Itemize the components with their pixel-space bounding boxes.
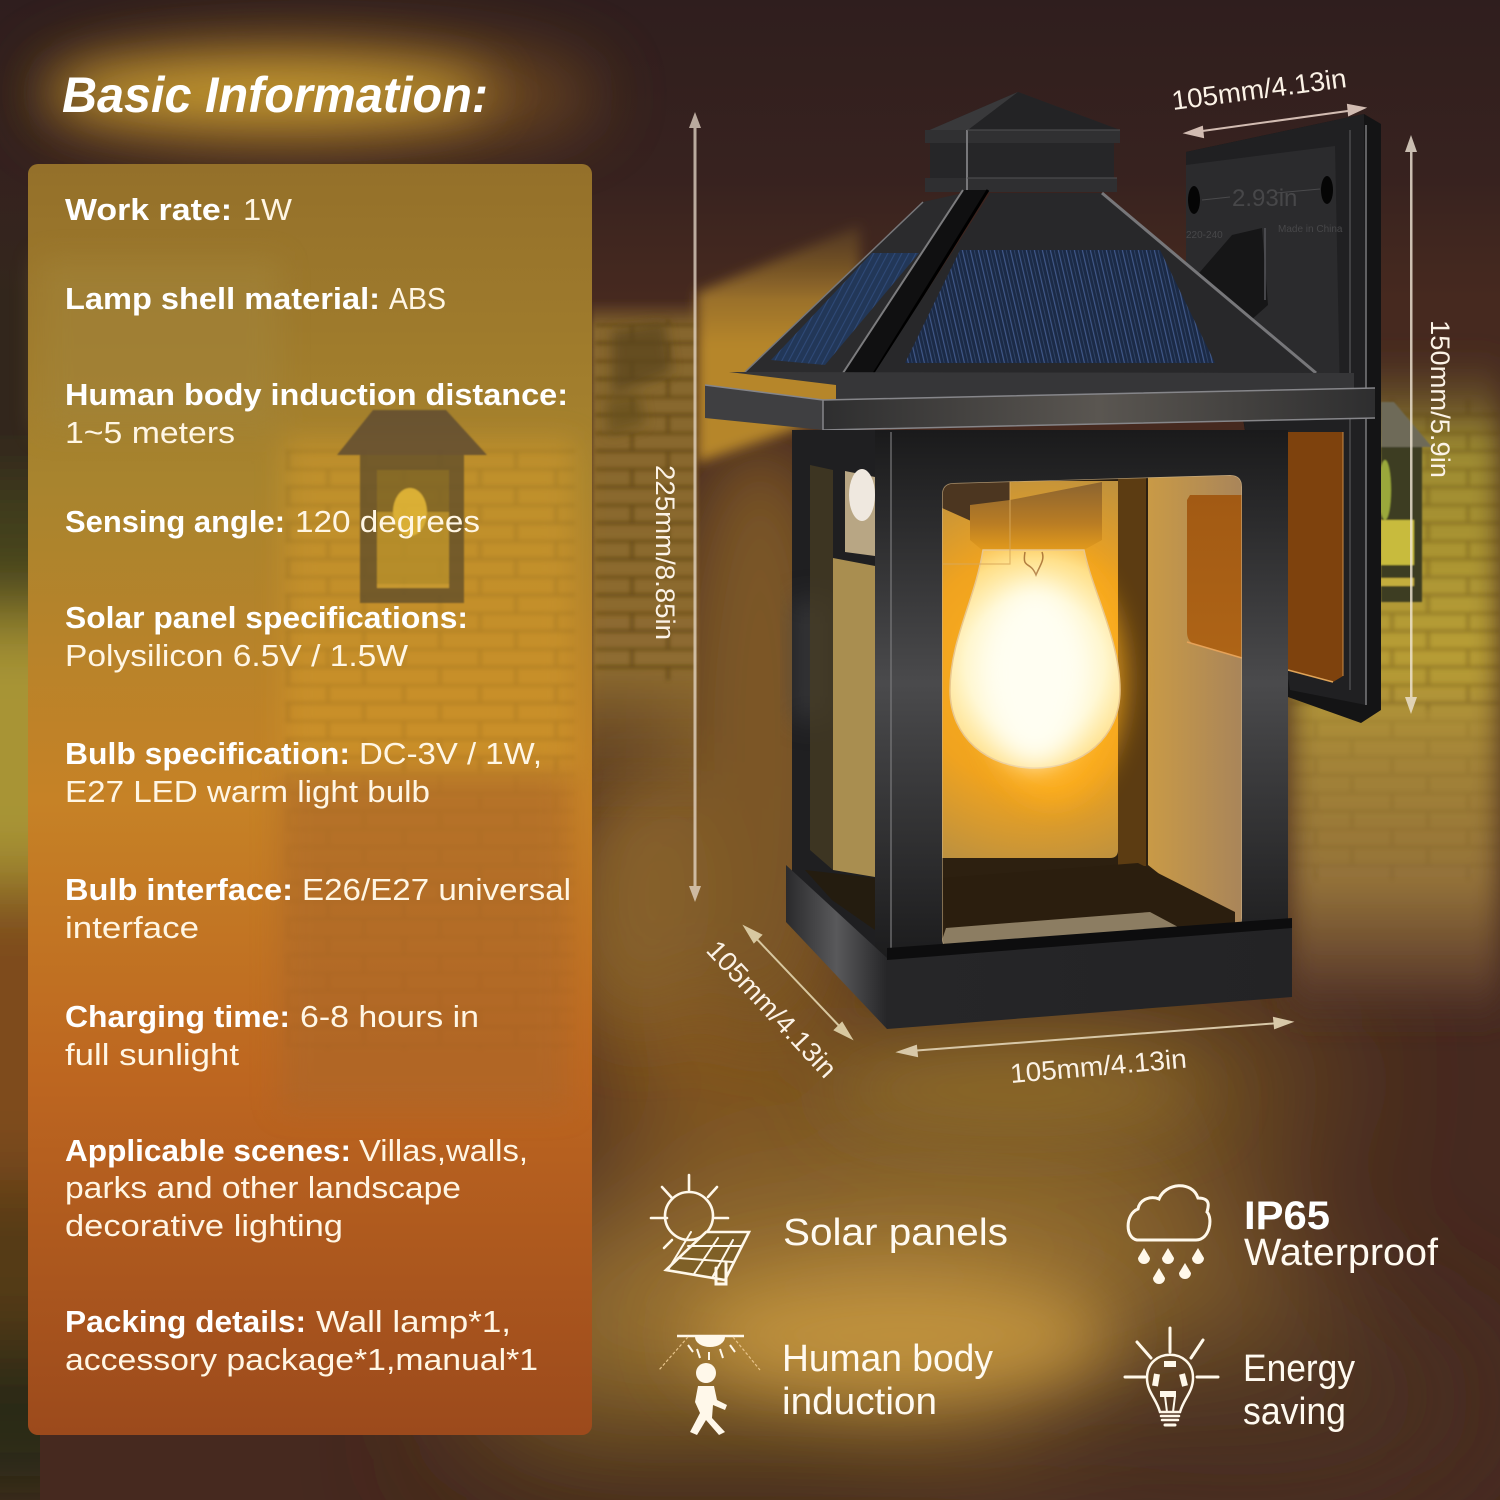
- ghost lamp on wall at the right edge: [1379, 402, 1432, 602]
- feature: solar panels: [651, 1175, 1008, 1284]
- scene: sunlit wall above lamp and brick pier: [697, 225, 860, 463]
- roof front face with solar panel: [870, 193, 1316, 380]
- dimension label: back plate height: 150mm/5.9in: [1425, 320, 1455, 478]
- front frame columns: [875, 430, 1288, 958]
- spec: applicable scenes: Applicable scenes:: [65, 1133, 351, 1168]
- spec: work rate: [65, 192, 293, 227]
- spec: packing details: [65, 1304, 538, 1377]
- label: energy saving: saving: [1243, 1391, 1346, 1433]
- mounting back plate: Made in China: [1278, 224, 1343, 235]
- mounting back plate: [1180, 114, 1381, 723]
- dimension: depth arrow: [745, 927, 851, 1038]
- spec: applicable scenes: [65, 1133, 528, 1243]
- outer title glow: [40, 40, 600, 150]
- spec: induction distance: 1~5 meters: [65, 415, 235, 450]
- label: solar panels: Solar panels: [783, 1212, 1008, 1254]
- glow around bulb: [980, 558, 1124, 802]
- dimension label: front width: 105mm/4.13in: [1009, 1044, 1188, 1089]
- spec: sensing angle: 120 degrees: [295, 504, 480, 539]
- spec: lamp shell material: ABS: [389, 281, 446, 316]
- dimension: back plate height arrow: [1405, 135, 1417, 714]
- feature: energy saving: [1125, 1328, 1355, 1433]
- dimension label: back plate width: 105mm/4.13in: [1170, 63, 1348, 116]
- spec: bulb specification: DC-3V / 1W,: [359, 736, 542, 771]
- ghost lamp in panel: [337, 410, 487, 603]
- label: human body induction: [782, 1338, 993, 1423]
- feature: waterproof: [1128, 1186, 1438, 1284]
- dimension label: depth: 105mm/4.13in: [701, 935, 843, 1084]
- spec: induction distance: Human body induction distance:: [65, 377, 568, 412]
- dimension label: height: 225mm/8.85in: [650, 465, 680, 640]
- spec: work rate: 1W: [243, 192, 293, 227]
- spec: solar panel: Solar panel specifications:: [65, 600, 468, 635]
- mounting back plate: 2.93in: [1232, 185, 1297, 212]
- spec: bulb interface: E26/E27 universal: [302, 872, 571, 907]
- dimension: front width arrow: [899, 1018, 1291, 1056]
- spec: solar panel: [65, 600, 468, 673]
- roof eave: [705, 372, 1375, 430]
- spec: solar panel: Polysilicon 6.5V / 1.5W: [65, 638, 409, 673]
- icon: sensor light and walking person: [659, 1336, 760, 1435]
- spec: induction distance: [65, 377, 568, 450]
- title: Basic Information:: [62, 67, 488, 123]
- spec: charging time: 6-8 hours in: [300, 999, 479, 1034]
- label: IP65: IP65: [1244, 1194, 1330, 1238]
- spec: packing details: accessory package*1,manual*1: [65, 1342, 538, 1377]
- spec: sensing angle: [65, 504, 480, 539]
- transparent box edge over socket: [942, 481, 1010, 564]
- panel brick wall photo showing through: [40, 260, 575, 1110]
- spec: charging time: full sunlight: [65, 1037, 239, 1072]
- window interior: [942, 475, 1242, 950]
- spec: lamp shell material: Lamp shell material:: [65, 281, 380, 316]
- mounting back plate: 220-240: [1186, 230, 1223, 241]
- spec: work rate: Work rate:: [65, 192, 232, 227]
- lamp left side: [792, 430, 875, 958]
- icon: rain cloud: [1128, 1186, 1210, 1284]
- spec: charging time: Charging time:: [65, 999, 290, 1034]
- label: human body induction: Human body: [782, 1338, 993, 1380]
- side strip left of panel: [0, 0, 40, 1500]
- spec: bulb specification: Bulb specification:: [65, 736, 350, 771]
- bulb socket: [970, 482, 1102, 550]
- spec: bulb specification: E27 LED warm light bulb: [65, 774, 430, 809]
- spec: applicable scenes: decorative lighting: [65, 1208, 343, 1243]
- glowing bulb: [950, 550, 1120, 768]
- spec: applicable scenes: parks and other landscape: [65, 1170, 461, 1205]
- feature: human body induction: [659, 1336, 993, 1435]
- icon: sun and solar panel: [651, 1175, 749, 1284]
- spec: bulb interface: [65, 872, 571, 945]
- title glow: [45, 58, 495, 126]
- label: human body induction: induction: [782, 1381, 937, 1423]
- lamp base: [786, 865, 1292, 1029]
- roof finial: [925, 92, 1120, 192]
- lamp product illustration: [705, 92, 1381, 1029]
- panel: specifications: [28, 164, 592, 1435]
- label: energy saving: [1243, 1348, 1355, 1433]
- roof left face with solar cell: [745, 190, 988, 380]
- spec: packing details: Packing details:: [65, 1304, 306, 1339]
- spec: bulb specification: [65, 736, 542, 809]
- label: waterproof: Waterproof: [1244, 1232, 1438, 1274]
- spec: bulb interface: Bulb interface:: [65, 872, 293, 907]
- spec: packing details: Wall lamp*1,: [316, 1304, 511, 1339]
- dimension: back plate width arrow: [1186, 105, 1364, 137]
- icon: recycling light bulb: [1125, 1328, 1218, 1425]
- label: energy saving: Energy: [1243, 1348, 1355, 1390]
- spec: bulb interface: interface: [65, 910, 199, 945]
- spec: charging time: [65, 999, 479, 1072]
- dimension: total height arrow: [689, 112, 701, 902]
- spec: sensing angle: Sensing angle:: [65, 504, 285, 539]
- spec: applicable scenes: Villas,walls,: [359, 1133, 528, 1168]
